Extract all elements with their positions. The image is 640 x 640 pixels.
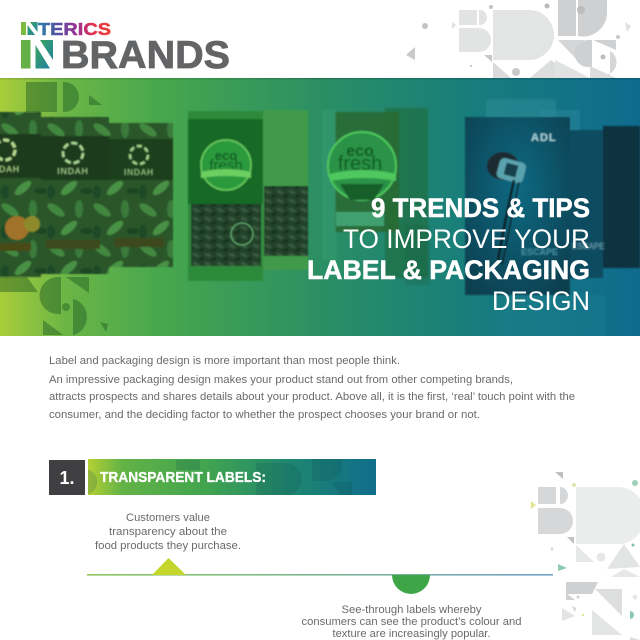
product: eco fresh pack second xyxy=(322,108,430,285)
hero background gradient xyxy=(0,78,640,336)
callout: customers value transparency: transparency about the xyxy=(109,526,227,538)
callout: customers value transparency: food products they purchase. xyxy=(95,540,241,552)
intro paragraph: attracts prospects and shares details about your product. Above all, it is the first, ‘real’ touch point with the xyxy=(49,391,575,403)
product: ADL earphones box: ESCAPE xyxy=(521,247,558,257)
section 1 heading bar xyxy=(88,459,376,495)
title line 4: DESIGN xyxy=(492,286,590,316)
intro paragraph: An impressive packaging design makes your product stand out from other competing brands, xyxy=(49,374,513,386)
INDAH pack 1 xyxy=(0,112,41,277)
hero title xyxy=(307,193,590,316)
decoration: bottom-right letter shapes xyxy=(531,472,640,640)
INDAH pack 2: INDAH xyxy=(57,166,89,176)
intro paragraph: Label and packaging design is more important than most people think. xyxy=(49,355,400,367)
title line 1: 9 TRENDS & TIPS xyxy=(371,193,590,223)
INDAH pack 2 xyxy=(41,117,109,274)
section 1 number badge: 1. xyxy=(59,468,75,488)
product: eco fresh pack second: eco xyxy=(346,143,374,160)
product: ADL earphones box xyxy=(464,99,640,296)
eco fresh logo xyxy=(201,140,251,190)
title line 2: TO IMPROVE YOUR xyxy=(343,224,590,254)
section 1 heading text: TRANSPARENT LABELS: xyxy=(100,470,266,486)
INDAH pack 3: INDAH xyxy=(124,168,154,177)
intro paragraph: consumer, and the deciding factor to whether the prospect chooses your brand or not. xyxy=(49,409,480,421)
callout: see-through labels: consumers can see the product’s colour and xyxy=(302,616,522,628)
eco fresh logo: eco xyxy=(215,148,237,163)
section 1 number badge xyxy=(49,460,85,495)
callout: see-through labels xyxy=(302,604,522,640)
hero banner xyxy=(0,78,640,336)
callout: customers value transparency: Customers value xyxy=(126,512,210,524)
ADL wordmark: ADL xyxy=(531,132,557,144)
logo: Interics in Brands xyxy=(21,19,230,77)
title line 3: LABEL & PACKAGING xyxy=(307,255,590,285)
decoration: top-right letter shapes xyxy=(406,0,631,78)
earphone xyxy=(487,152,527,265)
callout: customers value transparency xyxy=(95,512,241,552)
callout: see-through labels: texture are increasingly popular. xyxy=(332,628,490,640)
hero top edge xyxy=(0,78,640,80)
marker: green semicircle xyxy=(392,575,430,594)
product: INDAH packs xyxy=(0,112,173,277)
timeline xyxy=(87,558,553,594)
logo word: IN BRANDS: BRANDS xyxy=(61,34,230,77)
product: ADL earphones box: ESCAPE xyxy=(572,242,604,251)
INDAH pack 3 xyxy=(109,123,173,267)
marker: yellow-green triangle xyxy=(152,558,186,575)
intro paragraph xyxy=(49,355,575,421)
timeline line xyxy=(87,574,553,576)
callout: see-through labels: See-through labels whereby xyxy=(342,604,482,616)
product: eco fresh pack second: fresh xyxy=(338,153,382,175)
eco fresh logo: fresh xyxy=(209,157,243,174)
product: eco fresh pack front xyxy=(188,110,308,281)
logo word: INTERICS: TERICS xyxy=(38,19,111,39)
hero overlay shapes: left letters xyxy=(0,82,108,335)
